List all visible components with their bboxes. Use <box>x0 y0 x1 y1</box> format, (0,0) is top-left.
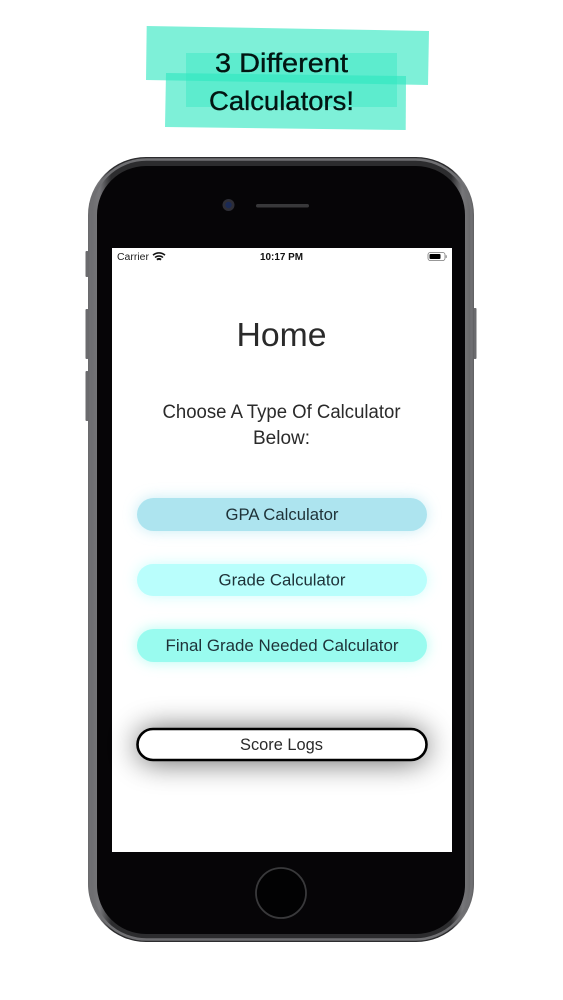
button: Grade Calculator: Grade Calculator <box>218 572 346 590</box>
phone face <box>97 166 465 934</box>
time: 10:17 PM <box>260 252 303 263</box>
icon: battery <box>428 252 447 260</box>
title line 2: Calculators! <box>209 86 354 116</box>
button: Grade Calculator <box>137 564 427 596</box>
prompt text <box>162 402 401 449</box>
title line 1: 3 Different <box>215 48 349 78</box>
button: GPA Calculator <box>137 498 427 531</box>
button: Final Grade Needed Calculator <box>137 629 427 662</box>
speaker <box>256 204 309 208</box>
side buttons <box>86 251 476 421</box>
button: GPA Calculator: GPA Calculator <box>226 506 339 524</box>
home button <box>256 868 306 918</box>
prompt line 1: Choose A Type Of Calculator <box>162 402 401 423</box>
button: Score Logs <box>137 729 427 762</box>
button: Score Logs: Score Logs <box>240 736 323 754</box>
camera <box>222 199 234 211</box>
button: Final Grade Needed Calculator: Final Grade Needed Calculator <box>166 637 399 655</box>
screen background <box>112 248 452 852</box>
screen <box>112 248 452 852</box>
carrier label: Carrier <box>117 252 150 263</box>
highlight: top band <box>146 26 429 85</box>
icon: wifi <box>153 253 165 260</box>
title <box>146 26 429 130</box>
bezel edge <box>90 160 472 940</box>
heading: Home: Home <box>236 316 326 353</box>
prompt line 2: Below: <box>253 428 310 449</box>
highlight: inner band <box>186 53 397 107</box>
phone body <box>88 157 474 942</box>
highlight: bottom band <box>165 73 406 130</box>
phone <box>86 157 476 942</box>
status bar <box>117 252 447 263</box>
